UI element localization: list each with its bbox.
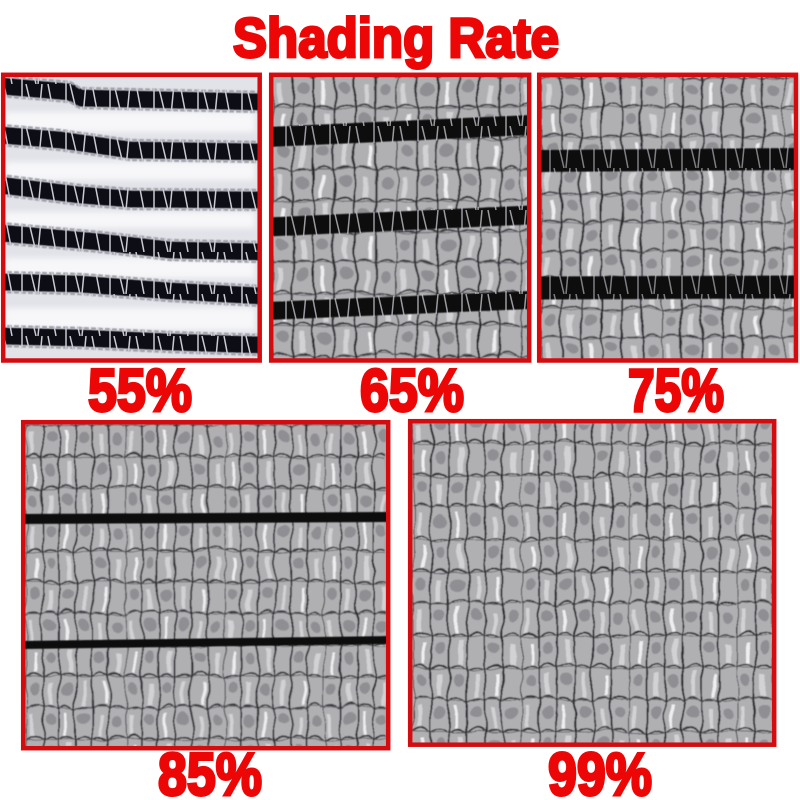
panel: 75% shading sample (538, 75, 798, 361)
label: 65%: 65% (360, 357, 464, 424)
label: 75%: 75% (628, 357, 724, 424)
panel: 55% shading sample (0, 75, 262, 361)
label: 55%: 55% (88, 357, 192, 424)
panel: 65% shading sample (268, 75, 530, 361)
title: Shading Rate (233, 6, 559, 69)
panel: 99% shading sample (410, 421, 774, 745)
panel: 85% shading sample (22, 422, 390, 748)
